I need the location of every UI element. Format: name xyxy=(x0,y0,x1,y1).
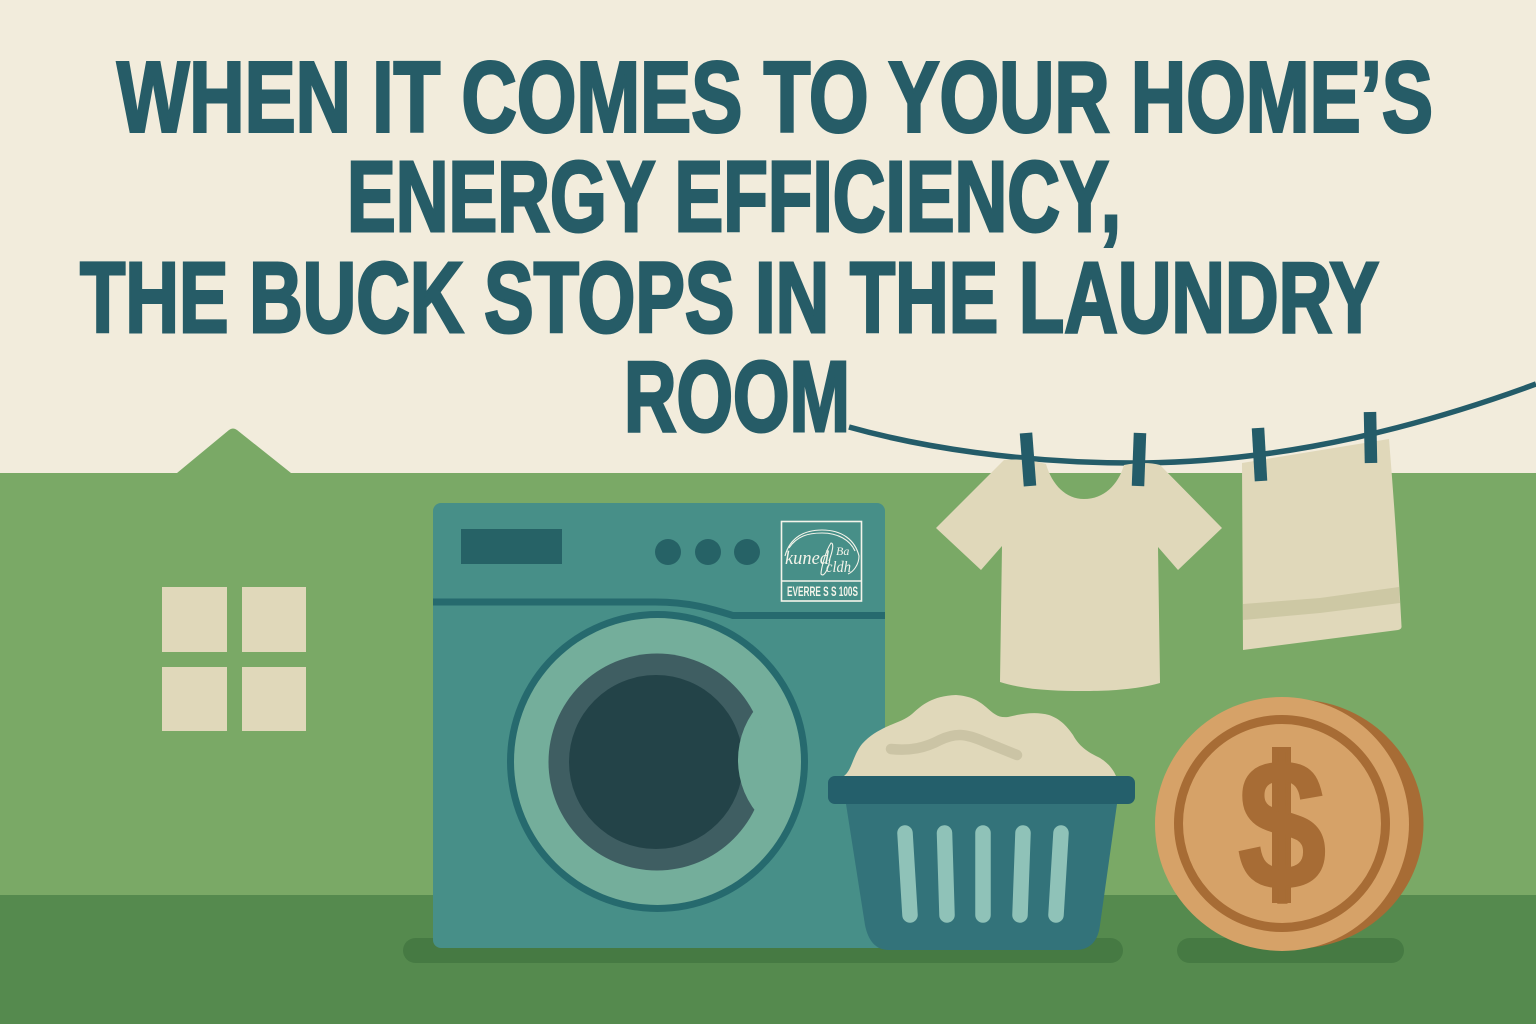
energy label badge xyxy=(782,522,862,601)
towel stripe xyxy=(1243,587,1400,620)
basket body xyxy=(846,804,1117,950)
laundry basket xyxy=(828,695,1135,950)
coin xyxy=(1155,697,1424,951)
laundry fold line xyxy=(891,735,1017,755)
dollar sign: $ xyxy=(1238,721,1326,929)
basket slats xyxy=(905,833,1061,915)
energy label badge: kuned xyxy=(785,548,829,569)
coin face xyxy=(1155,697,1409,951)
icon: house window xyxy=(162,587,306,731)
washer display xyxy=(461,529,562,564)
title line 2: ENERGY EFFICIENCY, xyxy=(347,141,1121,253)
washer and basket floor shadow xyxy=(403,938,1123,963)
energy label badge: cldh xyxy=(826,559,851,576)
towel xyxy=(1242,439,1402,650)
floor xyxy=(0,895,1536,1024)
clothes pegs xyxy=(1026,412,1371,486)
coin inner ring xyxy=(1178,720,1386,928)
energy label badge: EVERRE S S 100S xyxy=(787,584,858,599)
title xyxy=(80,42,1433,453)
clothesline xyxy=(849,384,1536,463)
washing machine xyxy=(433,503,906,948)
coin floor shadow xyxy=(1177,938,1404,963)
laundry pile xyxy=(844,695,1116,776)
washer body xyxy=(433,503,885,948)
t-shirt xyxy=(936,460,1222,691)
title line 4: ROOM xyxy=(624,341,850,453)
washer panel line xyxy=(433,602,885,616)
energy label badge: Ba xyxy=(836,544,849,558)
coin edge xyxy=(1168,700,1424,948)
washer door xyxy=(507,611,808,912)
washer control knobs xyxy=(655,539,760,565)
house wall with roof xyxy=(0,428,1536,1024)
basket rim xyxy=(828,776,1135,804)
